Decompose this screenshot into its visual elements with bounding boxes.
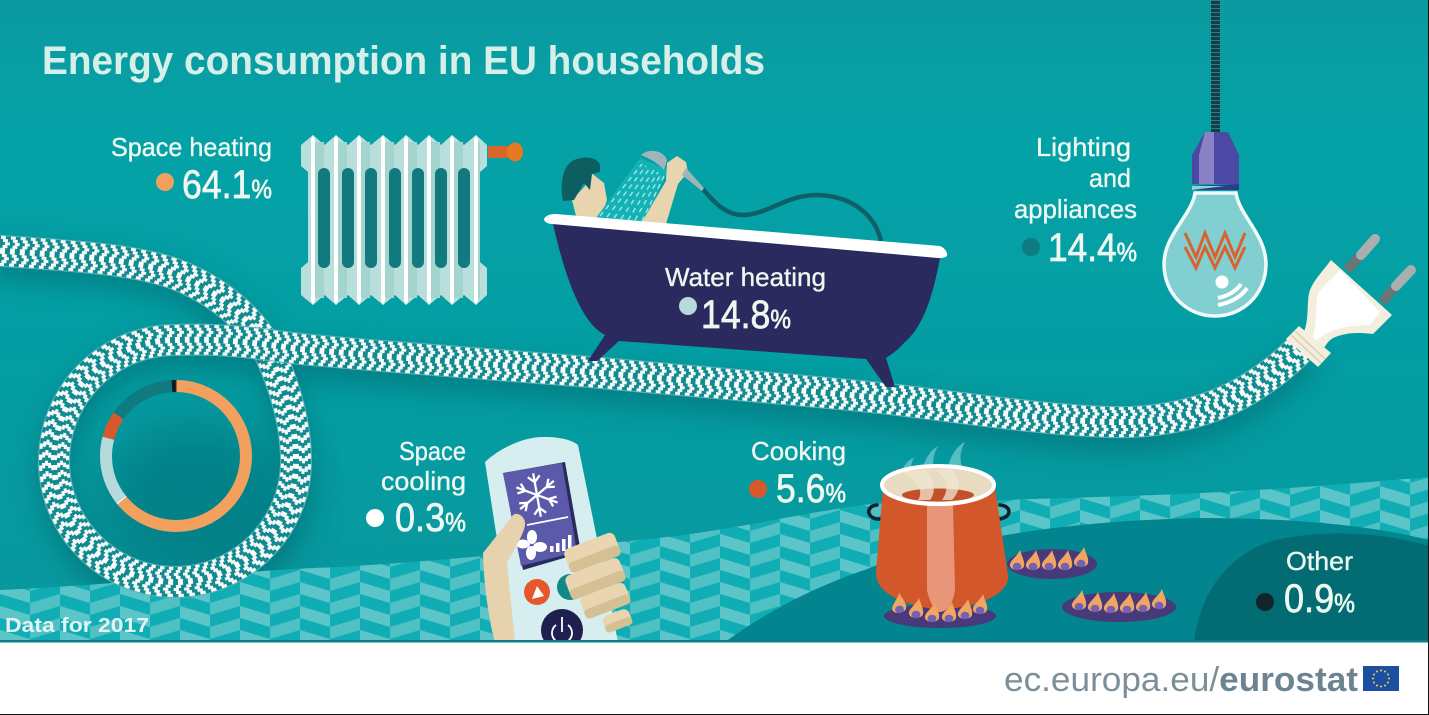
icon: radiator: [301, 135, 523, 305]
bulb filament: [1185, 233, 1245, 268]
pot interior: [882, 466, 994, 504]
icon: person in bathtub: [544, 151, 947, 387]
icon: gas burners: [884, 547, 1176, 628]
bathtub rim: [544, 214, 947, 258]
person head: [572, 172, 607, 220]
and word: and: [1089, 163, 1131, 193]
bathtub body: [553, 224, 940, 387]
panel: other label: [1256, 546, 1355, 621]
shower head: [641, 151, 667, 170]
rope shadow: [0, 262, 1308, 594]
icon: light bulb: [1164, 0, 1266, 316]
shower hose: [702, 188, 881, 241]
icon: EU flag: [1363, 666, 1399, 691]
water heating value: 14.8%: [701, 293, 791, 337]
cooking heading: Cooking: [751, 436, 846, 466]
cooking value: 5.6%: [776, 467, 846, 511]
fan and signal bars: [516, 530, 572, 560]
appliances word: appliances: [1014, 194, 1137, 224]
bulb glass: [1164, 193, 1266, 316]
rope cable front strand to plug: [175, 340, 1308, 422]
space heating marker: [156, 173, 174, 191]
lighting heading: Lighting: [1036, 132, 1131, 162]
remote screen: [503, 462, 581, 570]
rope cable back strand and loop: [0, 250, 296, 582]
other value: 0.9%: [1284, 577, 1355, 621]
loop interior shading: [100, 420, 290, 580]
cooling value: 0.3%: [395, 496, 466, 540]
donut chart: [106, 386, 246, 526]
teal button: [557, 574, 583, 600]
power button: [541, 609, 583, 651]
panel: water heating label: [665, 262, 826, 337]
pot body: [876, 487, 1008, 610]
lower flames: [889, 592, 907, 615]
orange button: [524, 579, 550, 605]
title: Energy consumption in EU households: [42, 39, 765, 83]
lighting value: 14.4%: [1048, 226, 1137, 270]
space heating heading: Space heating: [111, 132, 272, 162]
icon: cooking pot: [869, 442, 1009, 622]
plug collar: [1286, 326, 1331, 367]
remote body: [485, 437, 618, 642]
water heating heading: Water heating: [665, 262, 826, 292]
space heating value: 64.1%: [182, 163, 272, 207]
source url: ec.europa.eu/eurostat: [1004, 661, 1358, 699]
water spray: [596, 158, 668, 222]
bulb cord: [1211, 0, 1220, 133]
dark blob behind other: [1194, 533, 1429, 642]
cooling word: cooling: [381, 466, 466, 496]
snowflake: [514, 470, 560, 520]
lighting marker: [1022, 238, 1040, 256]
pot handles: [869, 505, 1009, 519]
plug prongs: [1347, 254, 1362, 270]
cooling heading: Space: [399, 436, 466, 466]
patterned floor: [0, 477, 1429, 642]
panel: space heating label: [111, 132, 272, 207]
other heading: Other: [1286, 546, 1353, 576]
fingers: [562, 531, 633, 633]
icon: remote control in hand: [483, 437, 633, 651]
pot steam: [902, 442, 966, 476]
plug body: [1303, 260, 1392, 362]
stove surface: [725, 518, 1429, 642]
water heating marker: [679, 297, 697, 315]
other marker: [1256, 593, 1274, 611]
cooling marker: [366, 509, 384, 527]
panel: cooking label: [749, 436, 846, 511]
data year note: Data for 2017: [5, 615, 149, 637]
panel: space cooling label: [366, 436, 466, 540]
person arm: [642, 156, 688, 224]
icon: plug: [1286, 239, 1411, 367]
bulb socket: [1192, 132, 1239, 184]
bulb highlight: [1216, 276, 1228, 288]
thumb: [483, 514, 525, 642]
panel: lighting and appliances label: [1014, 132, 1137, 270]
cooking marker: [749, 480, 767, 498]
